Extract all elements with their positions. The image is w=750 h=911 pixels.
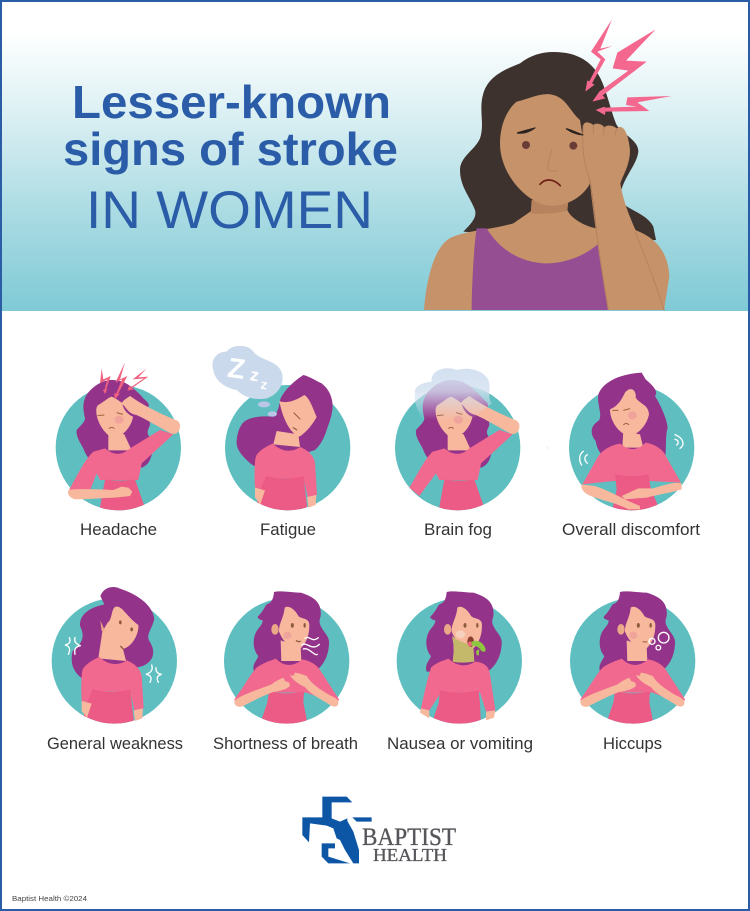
symptom labels: Overall discomfort <box>562 520 700 539</box>
teal circle <box>570 598 695 724</box>
logo wordmark: HEALTH <box>373 845 447 865</box>
figure <box>237 375 333 513</box>
symptom labels: Shortness of breath <box>213 734 358 753</box>
logo wordmark <box>362 824 456 865</box>
thought cloud <box>212 346 283 399</box>
arm outlines <box>548 125 664 310</box>
copyright: Baptist Health ©2024 <box>12 894 87 903</box>
sign: overall discomfort <box>569 373 694 513</box>
thought bubbles <box>258 401 277 417</box>
motion marks <box>580 435 683 465</box>
weakness marks <box>65 638 162 682</box>
mouth <box>540 180 560 186</box>
title <box>63 76 398 240</box>
vomit <box>472 641 486 656</box>
hero banner <box>0 0 750 311</box>
sign: shortness of breath <box>224 591 349 726</box>
purple top <box>472 228 608 310</box>
eyes <box>522 141 530 149</box>
symptom labels: Nausea or vomiting <box>387 734 533 753</box>
teal circle <box>56 385 181 510</box>
title: IN WOMEN <box>86 181 373 240</box>
shoulders <box>424 210 669 310</box>
neck shadow <box>530 200 568 214</box>
mouth <box>467 636 474 647</box>
sign: hiccups <box>570 591 695 726</box>
sign: fatigue <box>212 346 350 513</box>
title: signs of stroke <box>63 123 398 175</box>
fog cloud <box>415 368 492 420</box>
figure <box>580 591 685 726</box>
symptom labels: General weakness <box>47 734 183 753</box>
sleep letters <box>226 352 269 393</box>
figure <box>234 591 339 726</box>
teal circle <box>397 598 522 724</box>
figure <box>409 380 519 513</box>
breath lines <box>302 638 319 655</box>
teal circle <box>52 598 177 724</box>
raised arm <box>590 177 665 310</box>
figure <box>68 380 180 513</box>
lightning bolts <box>585 19 672 115</box>
symptom labels: Hiccups <box>603 734 662 753</box>
stray mark <box>547 446 549 449</box>
sign: brain fog <box>395 368 549 513</box>
teal circle <box>395 385 520 510</box>
eyebrows <box>517 128 583 135</box>
fist <box>583 122 630 185</box>
hiccup bubbles <box>649 632 669 650</box>
sign: headache <box>56 362 181 513</box>
sleep letters: Z <box>226 352 247 385</box>
teal circle <box>224 598 349 724</box>
title: Lesser-known <box>72 76 391 128</box>
lightning bolts <box>100 362 148 399</box>
teal circle <box>569 385 694 510</box>
logo wordmark: BAPTIST <box>362 824 456 851</box>
face <box>500 94 590 206</box>
sleep letters: z <box>259 377 269 393</box>
symptom labels: Headache <box>80 520 157 539</box>
teal circle <box>225 385 350 510</box>
figure <box>420 591 502 726</box>
figure <box>581 373 682 513</box>
sign: general weakness <box>52 587 177 726</box>
symptom labels <box>47 520 700 753</box>
logo mark <box>302 797 372 863</box>
symptom labels: Fatigue <box>260 520 316 539</box>
illustration: woman with headache <box>424 19 672 310</box>
logo: Baptist Health <box>302 797 456 865</box>
symptom labels: Brain fog <box>424 520 492 539</box>
sign: nausea or vomiting <box>397 591 522 726</box>
hair <box>460 52 656 243</box>
sleep letters: z <box>249 364 261 386</box>
figure <box>72 587 154 726</box>
